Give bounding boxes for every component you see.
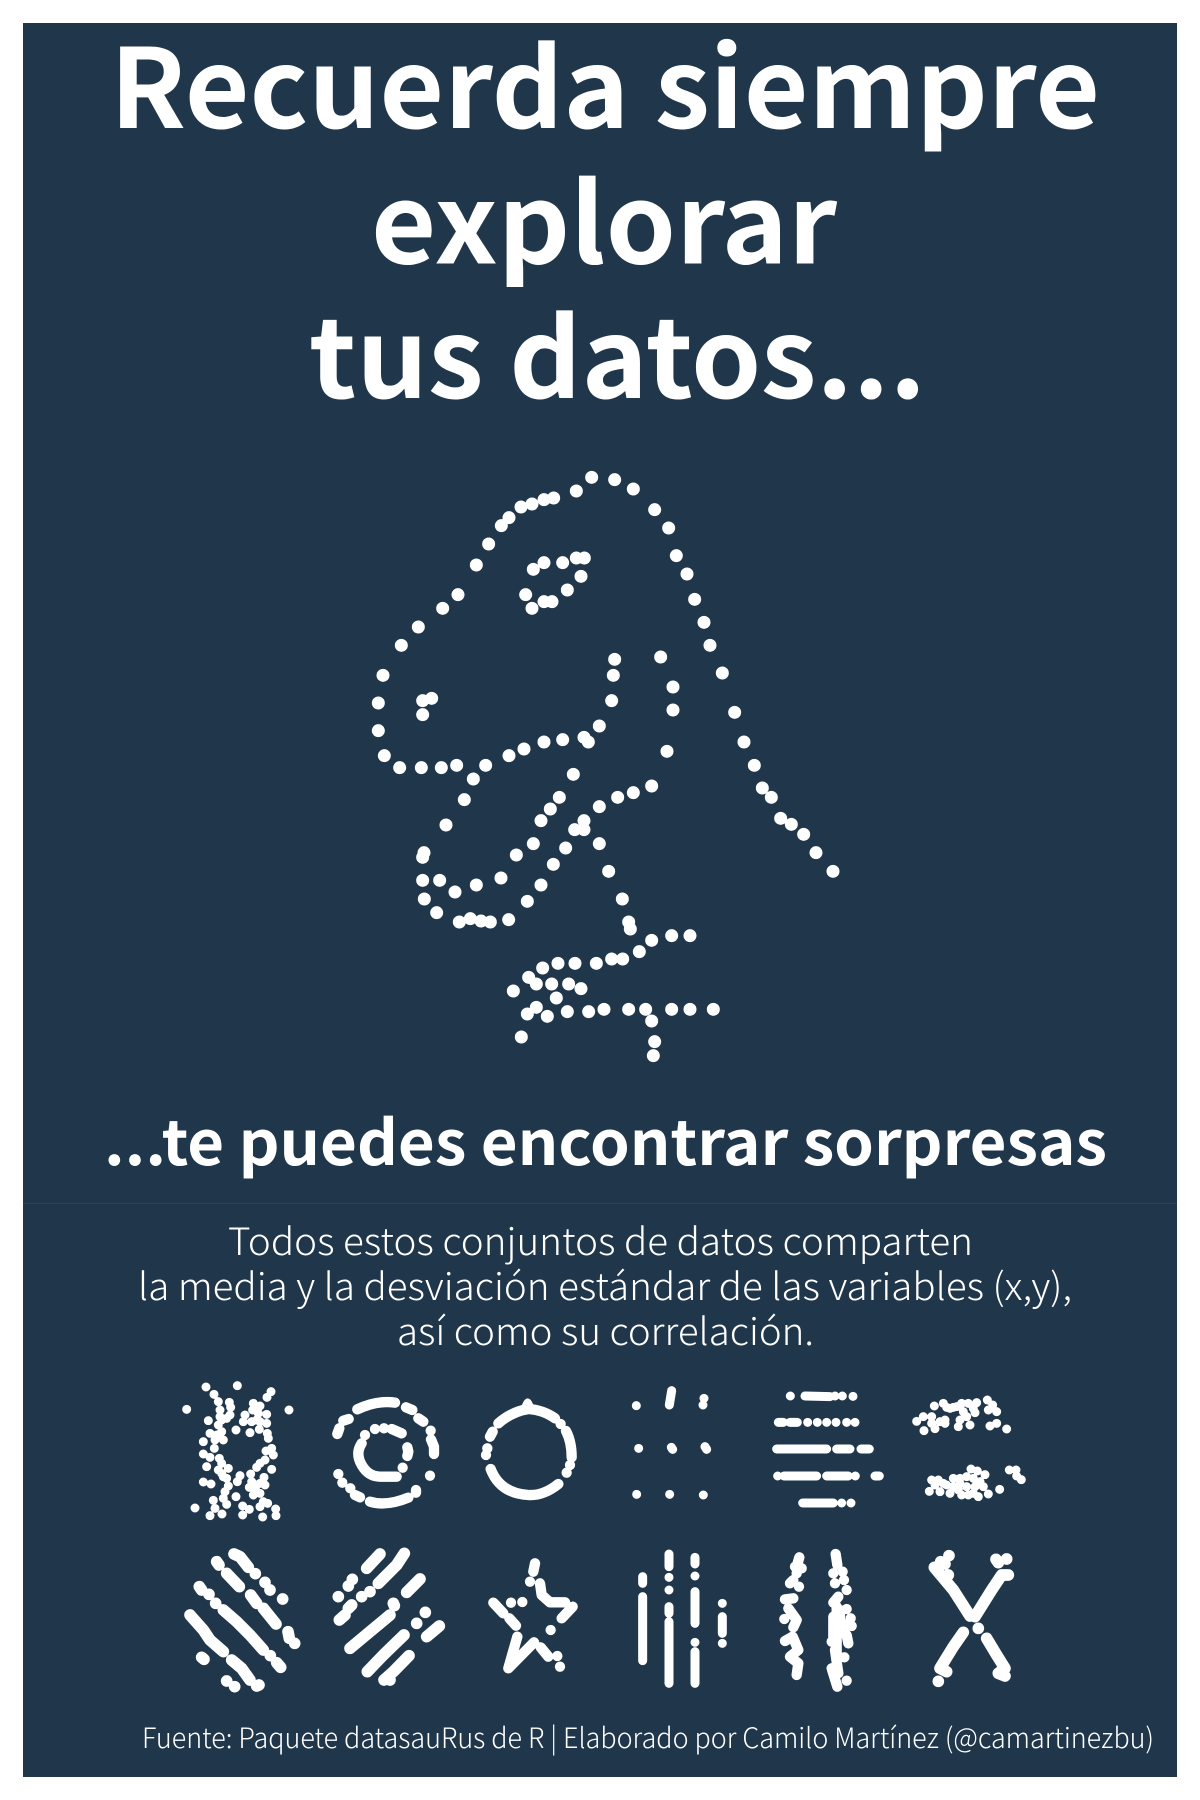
scatter: wide lines: [917, 1400, 1021, 1497]
scatter: h lines: [777, 1396, 879, 1503]
title: tus datos...: [309, 270, 926, 430]
scatter: v lines: [643, 1554, 722, 1683]
chart: small multiples row 2: [190, 1553, 1008, 1687]
title: explorar: [371, 136, 838, 296]
text block: explanation: Todos estos conjuntos de datos comparten: [228, 1211, 973, 1266]
scatter: star: [493, 1563, 573, 1668]
chart: small multiples row 1: [187, 1386, 1021, 1517]
scatter: slant down: [190, 1554, 295, 1687]
title: Recuerda siempre: [110, 0, 1100, 160]
scatter: dots: [636, 1391, 707, 1495]
text block: explanation: la media y la desviación estándar de las variables (x,y),: [138, 1256, 1072, 1311]
scatter: slant up: [338, 1553, 439, 1680]
scatter: high lines: [784, 1554, 852, 1687]
chart: dinosaur dot plot: [378, 477, 833, 1056]
source note: Fuente: Paquete datasauRus de R | Elaborado por Camilo Martínez (@camartinezbu): [142, 1717, 1154, 1757]
scatter: ring: [486, 1409, 572, 1495]
title: [110, 0, 1100, 430]
text block: explanation: así como su correlación.: [397, 1301, 814, 1356]
scatter: away: [187, 1386, 289, 1517]
scatter: circles: [337, 1402, 434, 1503]
text block: explanation: [138, 1211, 1072, 1356]
scatter: x shape: [934, 1556, 1008, 1681]
subtitle: ...te puedes encontrar sorpresas: [104, 1093, 1107, 1183]
